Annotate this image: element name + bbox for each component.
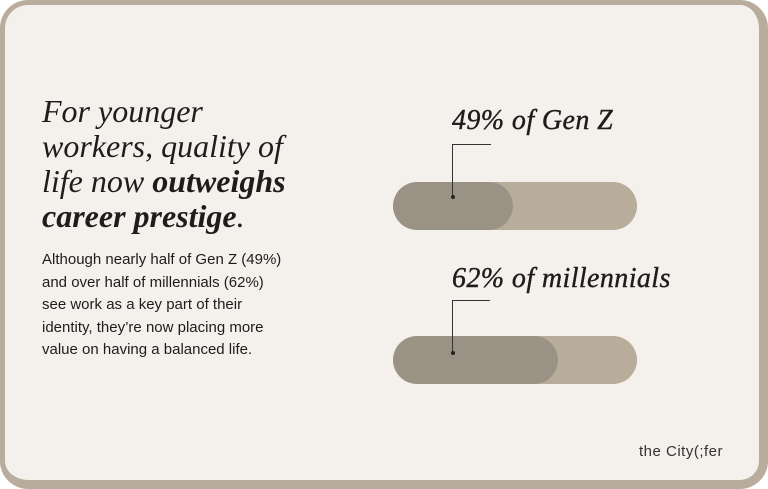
bar: gen z [393,182,637,230]
logo: the City(;fer [639,443,723,460]
body text: see work as a key part of their [42,296,242,313]
leader: gen z [451,144,491,199]
title: life now outweighs [42,163,286,199]
leader: millennials [451,300,490,355]
body text: identity, they’re now placing more [42,319,264,336]
title: For younger [42,93,203,129]
body text: value on having a balanced life. [42,341,252,358]
title [42,93,287,234]
body text [42,251,281,358]
title: workers, quality of [42,128,283,164]
body text: Although nearly half of Gen Z (49%) [42,251,281,268]
bar: millennials [393,336,637,384]
title: career prestige. [42,198,245,234]
body text: and over half of millennials (62%) [42,274,264,291]
label: gen z: 49% of Gen Z [452,105,613,136]
label: millennials: 62% of millennials [452,263,671,294]
